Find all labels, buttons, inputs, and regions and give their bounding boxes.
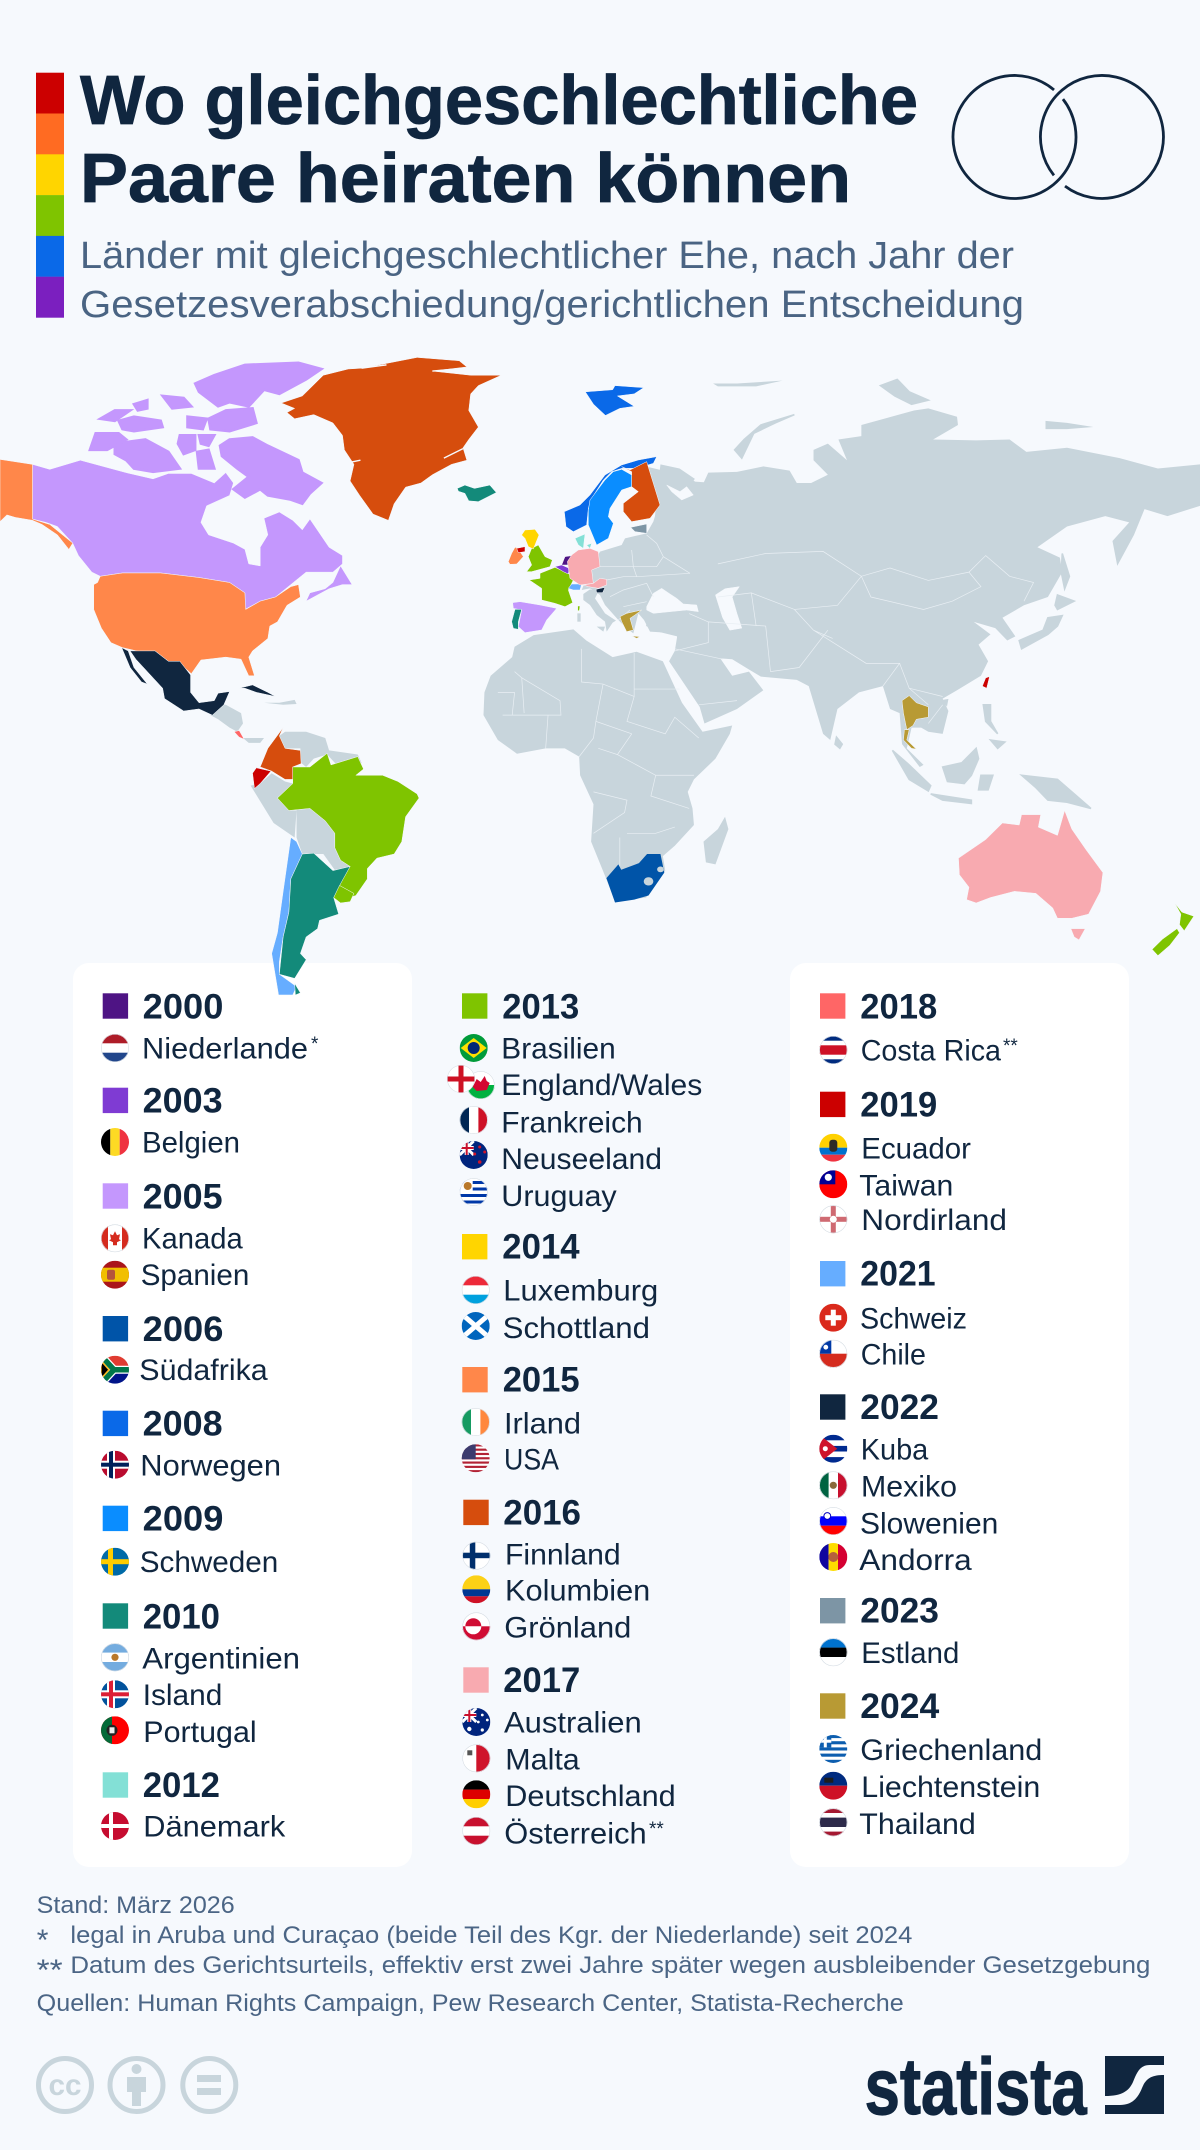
- year 2012: 2012: [143, 1766, 220, 1805]
- swatch 2015: [462, 1367, 488, 1392]
- region: Schweiz: [568, 584, 582, 590]
- flag: Österreich: [462, 1817, 490, 1845]
- label: Deutschland: Deutschland: [505, 1780, 676, 1813]
- label: Spanien: Spanien: [141, 1259, 249, 1292]
- footer notes: Quellen: Human Rights Campaign, Pew Research Center, Statista-Recherche: [37, 1990, 904, 2017]
- region: Argentinien: [279, 853, 350, 978]
- world map: [0, 357, 1200, 995]
- region: Thailand: [902, 696, 928, 749]
- label: Finnland: Finnland: [505, 1539, 621, 1572]
- label: Portugal: Portugal: [143, 1716, 257, 1749]
- region: Irland: [508, 547, 523, 564]
- flag: Costa Rica: [819, 1036, 847, 1064]
- region: Ecuador: [253, 768, 271, 789]
- label: Taiwan: Taiwan: [859, 1170, 953, 1203]
- flag: Malta: [462, 1744, 490, 1772]
- year 2008: 2008: [143, 1404, 223, 1443]
- label: Kuba: Kuba: [861, 1433, 929, 1466]
- region: Estland: [631, 524, 647, 533]
- label: Neuseeland: Neuseeland: [501, 1143, 662, 1176]
- region: Taiwan: [982, 677, 990, 688]
- region: Nordirland: [517, 547, 525, 553]
- swatch 2013: [462, 993, 487, 1019]
- region: Neuseeland: [1152, 903, 1194, 956]
- swatch 2010: [103, 1603, 128, 1629]
- label: Niederlande: Niederlande: [142, 1032, 308, 1065]
- flag: Kanada: [101, 1224, 129, 1252]
- region: Griechenland: [620, 610, 642, 632]
- year 2009: 2009: [143, 1499, 223, 1538]
- logo: statista: statista: [865, 2042, 1087, 2131]
- region: Mexiko: [122, 648, 276, 715]
- label: Island: Island: [143, 1679, 222, 1712]
- label: Schottland: Schottland: [503, 1312, 650, 1345]
- flag: Luxemburg: [462, 1276, 490, 1304]
- flag: Irland: [462, 1408, 490, 1436]
- region: Kuba: [239, 685, 276, 697]
- legend: 2023: [819, 1592, 959, 1670]
- flag: Slowenien: [819, 1507, 847, 1535]
- label: Thailand: Thailand: [859, 1808, 976, 1841]
- label: Frankreich: Frankreich: [501, 1106, 643, 1139]
- swatch 2019: [820, 1092, 845, 1117]
- legend: 2005: [101, 1177, 249, 1292]
- year 2018: 2018: [860, 987, 937, 1026]
- swatch 2012: [103, 1772, 128, 1798]
- land: Eurasia, Africa and other countries without same-sex marriage: [210, 379, 1200, 902]
- region: Australien: [958, 811, 1103, 940]
- year 2024: 2024: [860, 1687, 940, 1726]
- region: Frankreich: [529, 567, 580, 611]
- label: Dänemark: Dänemark: [143, 1811, 286, 1844]
- year 2022: 2022: [860, 1388, 939, 1427]
- region: Spanien: [513, 602, 557, 633]
- region: Norwegen: [564, 457, 657, 532]
- label: Ecuador: Ecuador: [861, 1132, 971, 1165]
- region: England/Wales: [527, 545, 552, 572]
- year 2014: 2014: [502, 1228, 580, 1267]
- footer notes: Stand: März 2026: [37, 1892, 235, 1919]
- label: Andorra: Andorra: [859, 1544, 972, 1577]
- region: Kanada: [33, 363, 352, 609]
- region: Chile: [272, 837, 302, 995]
- label: Argentinien: Argentinien: [142, 1642, 300, 1675]
- country borders: [498, 551, 1034, 866]
- icon: creative commons licence: [38, 2058, 236, 2112]
- year 2010: 2010: [143, 1597, 220, 1636]
- footnote mark: **: [649, 1819, 664, 1840]
- label: Luxemburg: Luxemburg: [503, 1275, 658, 1308]
- flag: Kolumbien: [462, 1575, 490, 1603]
- flag: Ecuador: [819, 1134, 847, 1162]
- label: Schweden: Schweden: [140, 1546, 278, 1579]
- label: Griechenland: Griechenland: [860, 1734, 1042, 1767]
- label: USA: USA: [504, 1443, 559, 1476]
- year 2016: 2016: [503, 1493, 581, 1532]
- label: Uruguay: Uruguay: [501, 1180, 617, 1213]
- flag: Andorra: [819, 1543, 847, 1571]
- icon: interlocked wedding rings: [953, 75, 1163, 198]
- label: Estland: Estland: [861, 1637, 959, 1670]
- title: [80, 61, 918, 217]
- swatch 2021: [820, 1261, 845, 1286]
- year 2013: 2013: [502, 987, 579, 1026]
- region: Niederlande: [562, 556, 572, 565]
- legend: 2017: [462, 1661, 676, 1850]
- region: Slowenien: [596, 587, 605, 593]
- seas: Black Sea, Caspian, White Sea: [647, 485, 742, 630]
- flag: England: [447, 1065, 475, 1093]
- label: Österreich: Österreich: [504, 1817, 647, 1850]
- flag: Portugal: [101, 1716, 129, 1744]
- legend: 2012: [101, 1772, 286, 1840]
- flag: Argentinien: [101, 1643, 129, 1671]
- subtitle: Länder mit gleichgeschlechtlicher Ehe, nach Jahr der: [80, 235, 1014, 277]
- footnote mark: *: [311, 1034, 319, 1055]
- flag: Neuseeland: [460, 1141, 488, 1169]
- region: Schweden: [588, 469, 632, 545]
- swatch 2006: [103, 1316, 128, 1341]
- label: Norwegen: Norwegen: [140, 1449, 281, 1482]
- region: Grönland: [281, 357, 501, 520]
- legend: 2018: [819, 987, 1018, 1068]
- label: Brasilien: Brasilien: [501, 1032, 616, 1065]
- year 2005: 2005: [143, 1177, 223, 1216]
- flag: Griechenland: [819, 1735, 847, 1763]
- flag: Niederlande: [101, 1034, 129, 1062]
- region: Kolumbien: [260, 728, 301, 779]
- legend: 2013: [447, 987, 702, 1213]
- flag: Uruguay: [460, 1178, 488, 1206]
- subtitle: Gesetzesverabschiedung/gerichtlichen Entscheidung: [80, 284, 1024, 326]
- legend: 2009: [101, 1506, 276, 1576]
- label: England/Wales: England/Wales: [501, 1069, 702, 1102]
- label: Chile: Chile: [861, 1338, 926, 1371]
- panel: legend right column: [790, 963, 1129, 1867]
- swatch 2023: [820, 1598, 845, 1623]
- flag: Norwegen: [101, 1451, 129, 1479]
- label: Mexiko: Mexiko: [861, 1471, 957, 1504]
- label: Malta: Malta: [505, 1743, 580, 1776]
- swatch 2016: [463, 1500, 489, 1525]
- swatch 2000: [103, 993, 128, 1019]
- region: Belgien: [555, 565, 569, 574]
- region: USA with Alaska: [0, 459, 300, 676]
- swatch 2008: [103, 1411, 128, 1436]
- year 2015: 2015: [503, 1361, 580, 1400]
- flag: USA: [462, 1444, 490, 1472]
- flag: Frankreich: [460, 1106, 488, 1134]
- label: Grönland: Grönland: [504, 1612, 631, 1645]
- flag: Deutschland: [462, 1780, 490, 1808]
- flag: Kuba: [819, 1435, 847, 1463]
- legend: 2021: [819, 1255, 967, 1371]
- flag: Finnland: [462, 1542, 490, 1570]
- swatch 2003: [103, 1088, 128, 1113]
- region: Finnland: [622, 462, 660, 522]
- label: Costa Rica: Costa Rica: [861, 1035, 1001, 1068]
- subtitle: [80, 235, 1024, 326]
- icon: creative commons licence: cc: [48, 2069, 82, 2102]
- legend: 2010: [101, 1597, 300, 1749]
- footer notes: legal in Aruba und Curaçao (beide Teil des Kgr. der Niederlande) seit 2024: [70, 1922, 912, 1949]
- region: Portugal: [512, 609, 522, 629]
- flag: Brasilien: [460, 1034, 488, 1062]
- legend: 2006: [101, 1316, 268, 1384]
- region: Island: [457, 485, 496, 502]
- flag: Dänemark: [101, 1812, 129, 1840]
- region: Deutschland and Österreich: [567, 548, 607, 588]
- flag: Thailand: [819, 1808, 847, 1836]
- flag: Taiwan: [819, 1170, 847, 1198]
- flag: Estland: [819, 1638, 847, 1666]
- label: Liechtenstein: Liechtenstein: [861, 1771, 1040, 1804]
- year 2017: 2017: [503, 1661, 580, 1700]
- label: Belgien: Belgien: [142, 1127, 240, 1160]
- year 2023: 2023: [860, 1592, 939, 1631]
- flag: Mexiko: [819, 1471, 847, 1499]
- flag: Südafrika: [101, 1356, 129, 1384]
- flag: Grönland: [462, 1612, 490, 1640]
- swatch 2009: [103, 1506, 128, 1531]
- legend: 2000: [101, 993, 318, 1062]
- label: Schweiz: Schweiz: [860, 1302, 967, 1335]
- flag: Island: [101, 1680, 129, 1708]
- swatch 2017: [463, 1667, 489, 1693]
- region: Brasilien and Uruguay: [277, 753, 419, 903]
- panel: legend left column: [73, 963, 412, 1867]
- footer notes: **: [37, 1954, 63, 1987]
- swatch 2014: [462, 1234, 487, 1259]
- year 2006: 2006: [143, 1310, 223, 1349]
- flag: Schottland: [462, 1312, 490, 1340]
- flag: Belgien: [101, 1128, 129, 1156]
- region: Südafrika: [606, 854, 664, 903]
- label: Irland: Irland: [504, 1407, 581, 1440]
- flag: Chile: [819, 1340, 847, 1368]
- swatch 2005: [103, 1183, 128, 1209]
- year 2019: 2019: [860, 1085, 937, 1124]
- region: Spitzbergen: [585, 386, 644, 415]
- legend: 2022: [819, 1388, 998, 1577]
- legend: 2014: [462, 1228, 658, 1345]
- label: Südafrika: Südafrika: [139, 1354, 268, 1387]
- flag: Schweden: [101, 1548, 129, 1576]
- legend: 2008: [101, 1404, 281, 1482]
- legend: 2016: [462, 1493, 650, 1645]
- legend: 2003: [101, 1082, 240, 1160]
- flag: Liechtenstein: [819, 1772, 847, 1800]
- footnote mark: **: [1003, 1036, 1018, 1057]
- flag: Nordirland: [819, 1205, 847, 1233]
- region: Dänemark: [575, 534, 592, 548]
- footer notes: [37, 1892, 1150, 2017]
- swatch 2018: [820, 993, 845, 1019]
- title: Paare heiraten können: [80, 139, 851, 217]
- footer notes: Datum des Gerichtsurteils, effektiv erst zwei Jahre später wegen ausbleibender Gesetzgebung: [70, 1952, 1150, 1979]
- flag: Schweiz: [819, 1304, 847, 1332]
- flag: Spanien: [101, 1261, 129, 1289]
- label: Nordirland: Nordirland: [861, 1204, 1007, 1237]
- footer notes: *: [37, 1924, 49, 1957]
- flag: Wales: [467, 1071, 495, 1099]
- year 2000: 2000: [143, 987, 223, 1026]
- label: Kolumbien: Kolumbien: [505, 1574, 650, 1607]
- legend: 2015: [462, 1361, 581, 1476]
- rainbow bar: [36, 73, 64, 318]
- label: Kanada: Kanada: [142, 1222, 243, 1255]
- year 2021: 2021: [860, 1255, 936, 1294]
- region: Schottland: [522, 529, 539, 549]
- flag: Australien: [462, 1708, 490, 1736]
- year 2003: 2003: [143, 1082, 223, 1121]
- label: Slowenien: Slowenien: [860, 1507, 998, 1540]
- legend: 2019: [819, 1085, 1007, 1237]
- legend: 2024: [819, 1687, 1042, 1841]
- label: Australien: Australien: [504, 1706, 642, 1739]
- swatch 2022: [820, 1394, 845, 1420]
- title: Wo gleichgeschlechtliche: [80, 61, 918, 139]
- swatch 2024: [820, 1693, 845, 1719]
- region: Costa Rica: [234, 730, 244, 739]
